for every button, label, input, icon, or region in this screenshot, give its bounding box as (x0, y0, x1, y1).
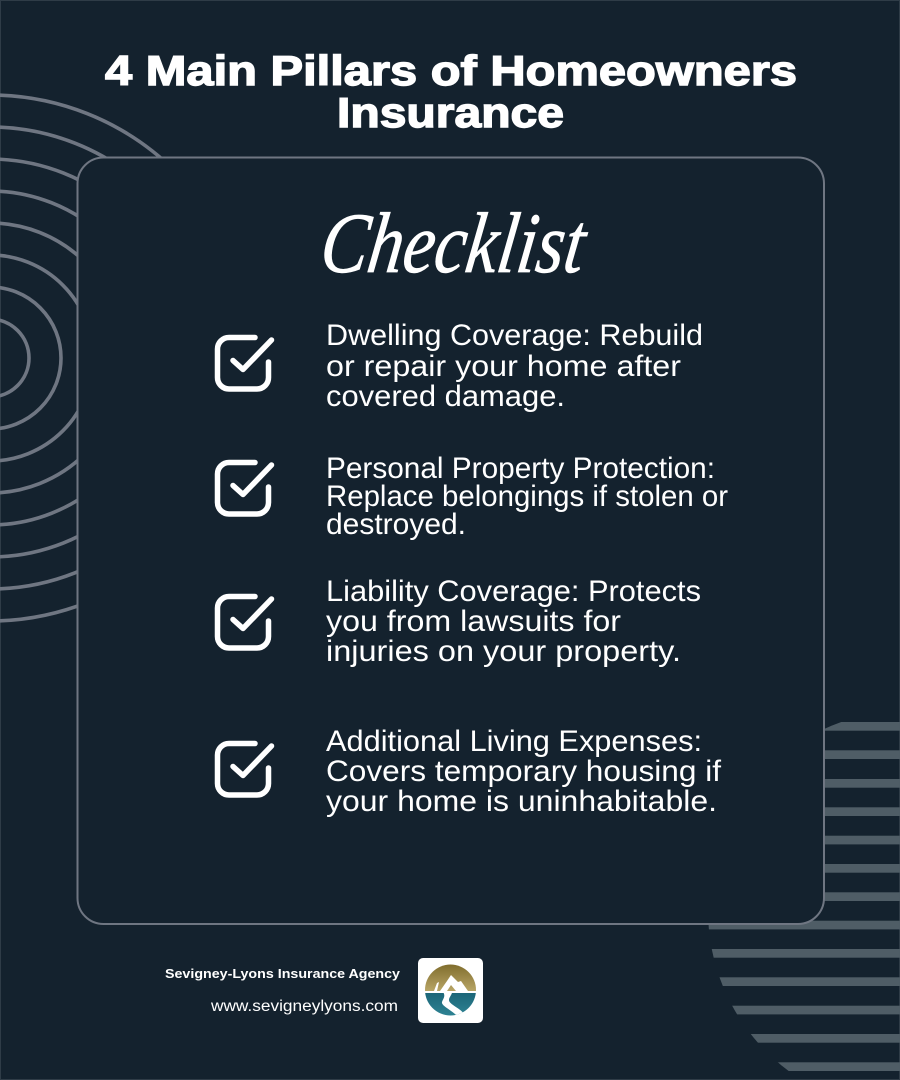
text: additional living expenses: Additional Living Expenses: (326, 725, 702, 758)
heading: Checklist: Checklist (315, 195, 593, 291)
icon: checkbox (218, 462, 272, 514)
text: liability coverage (326, 575, 701, 668)
checklist item: liability coverage (218, 575, 701, 668)
checklist item: personal property (218, 452, 728, 541)
text: personal property: Personal Property Protection: (326, 452, 715, 485)
icon: checkbox (218, 338, 272, 389)
checklist item: dwelling coverage (218, 319, 703, 413)
decorative stripes circle (700, 722, 900, 1071)
icon: checkbox (218, 596, 272, 648)
text: dwelling coverage (326, 319, 703, 413)
text: dwelling coverage: Dwelling Coverage: Rebuild (326, 319, 703, 352)
text: additional living expenses: Covers temporary housing if (326, 755, 722, 788)
text: personal property: destroyed. (326, 508, 466, 541)
panel: checklist card (78, 158, 824, 924)
title: Insurance (337, 89, 564, 136)
text: dwelling coverage: covered damage. (326, 380, 565, 413)
text: dwelling coverage: or repair your home after (326, 350, 681, 383)
icon: checkbox (218, 744, 272, 795)
text: liability coverage: Liability Coverage: Protects (326, 575, 701, 608)
footer: agency name and website: Sevigney-Lyons Insurance Agency (165, 966, 401, 981)
title (105, 47, 797, 136)
title: 4 Main Pillars of Homeowners (105, 47, 797, 94)
footer: agency name and website: www.sevigneylyons.com (210, 998, 398, 1015)
text: personal property (326, 452, 728, 541)
text: liability coverage: you from lawsuits for (326, 605, 621, 638)
footer: agency name and website (165, 966, 401, 1015)
decorative concentric arcs (0, 95, 253, 621)
icon: agency logo (418, 958, 483, 1023)
text: additional living expenses: your home is uninhabitable. (326, 785, 717, 818)
checklist item: additional living expenses (218, 725, 722, 818)
text: personal property: Replace belongings if stolen or (326, 480, 728, 513)
text: liability coverage: injuries on your property. (326, 635, 681, 668)
text: additional living expenses (326, 725, 722, 818)
